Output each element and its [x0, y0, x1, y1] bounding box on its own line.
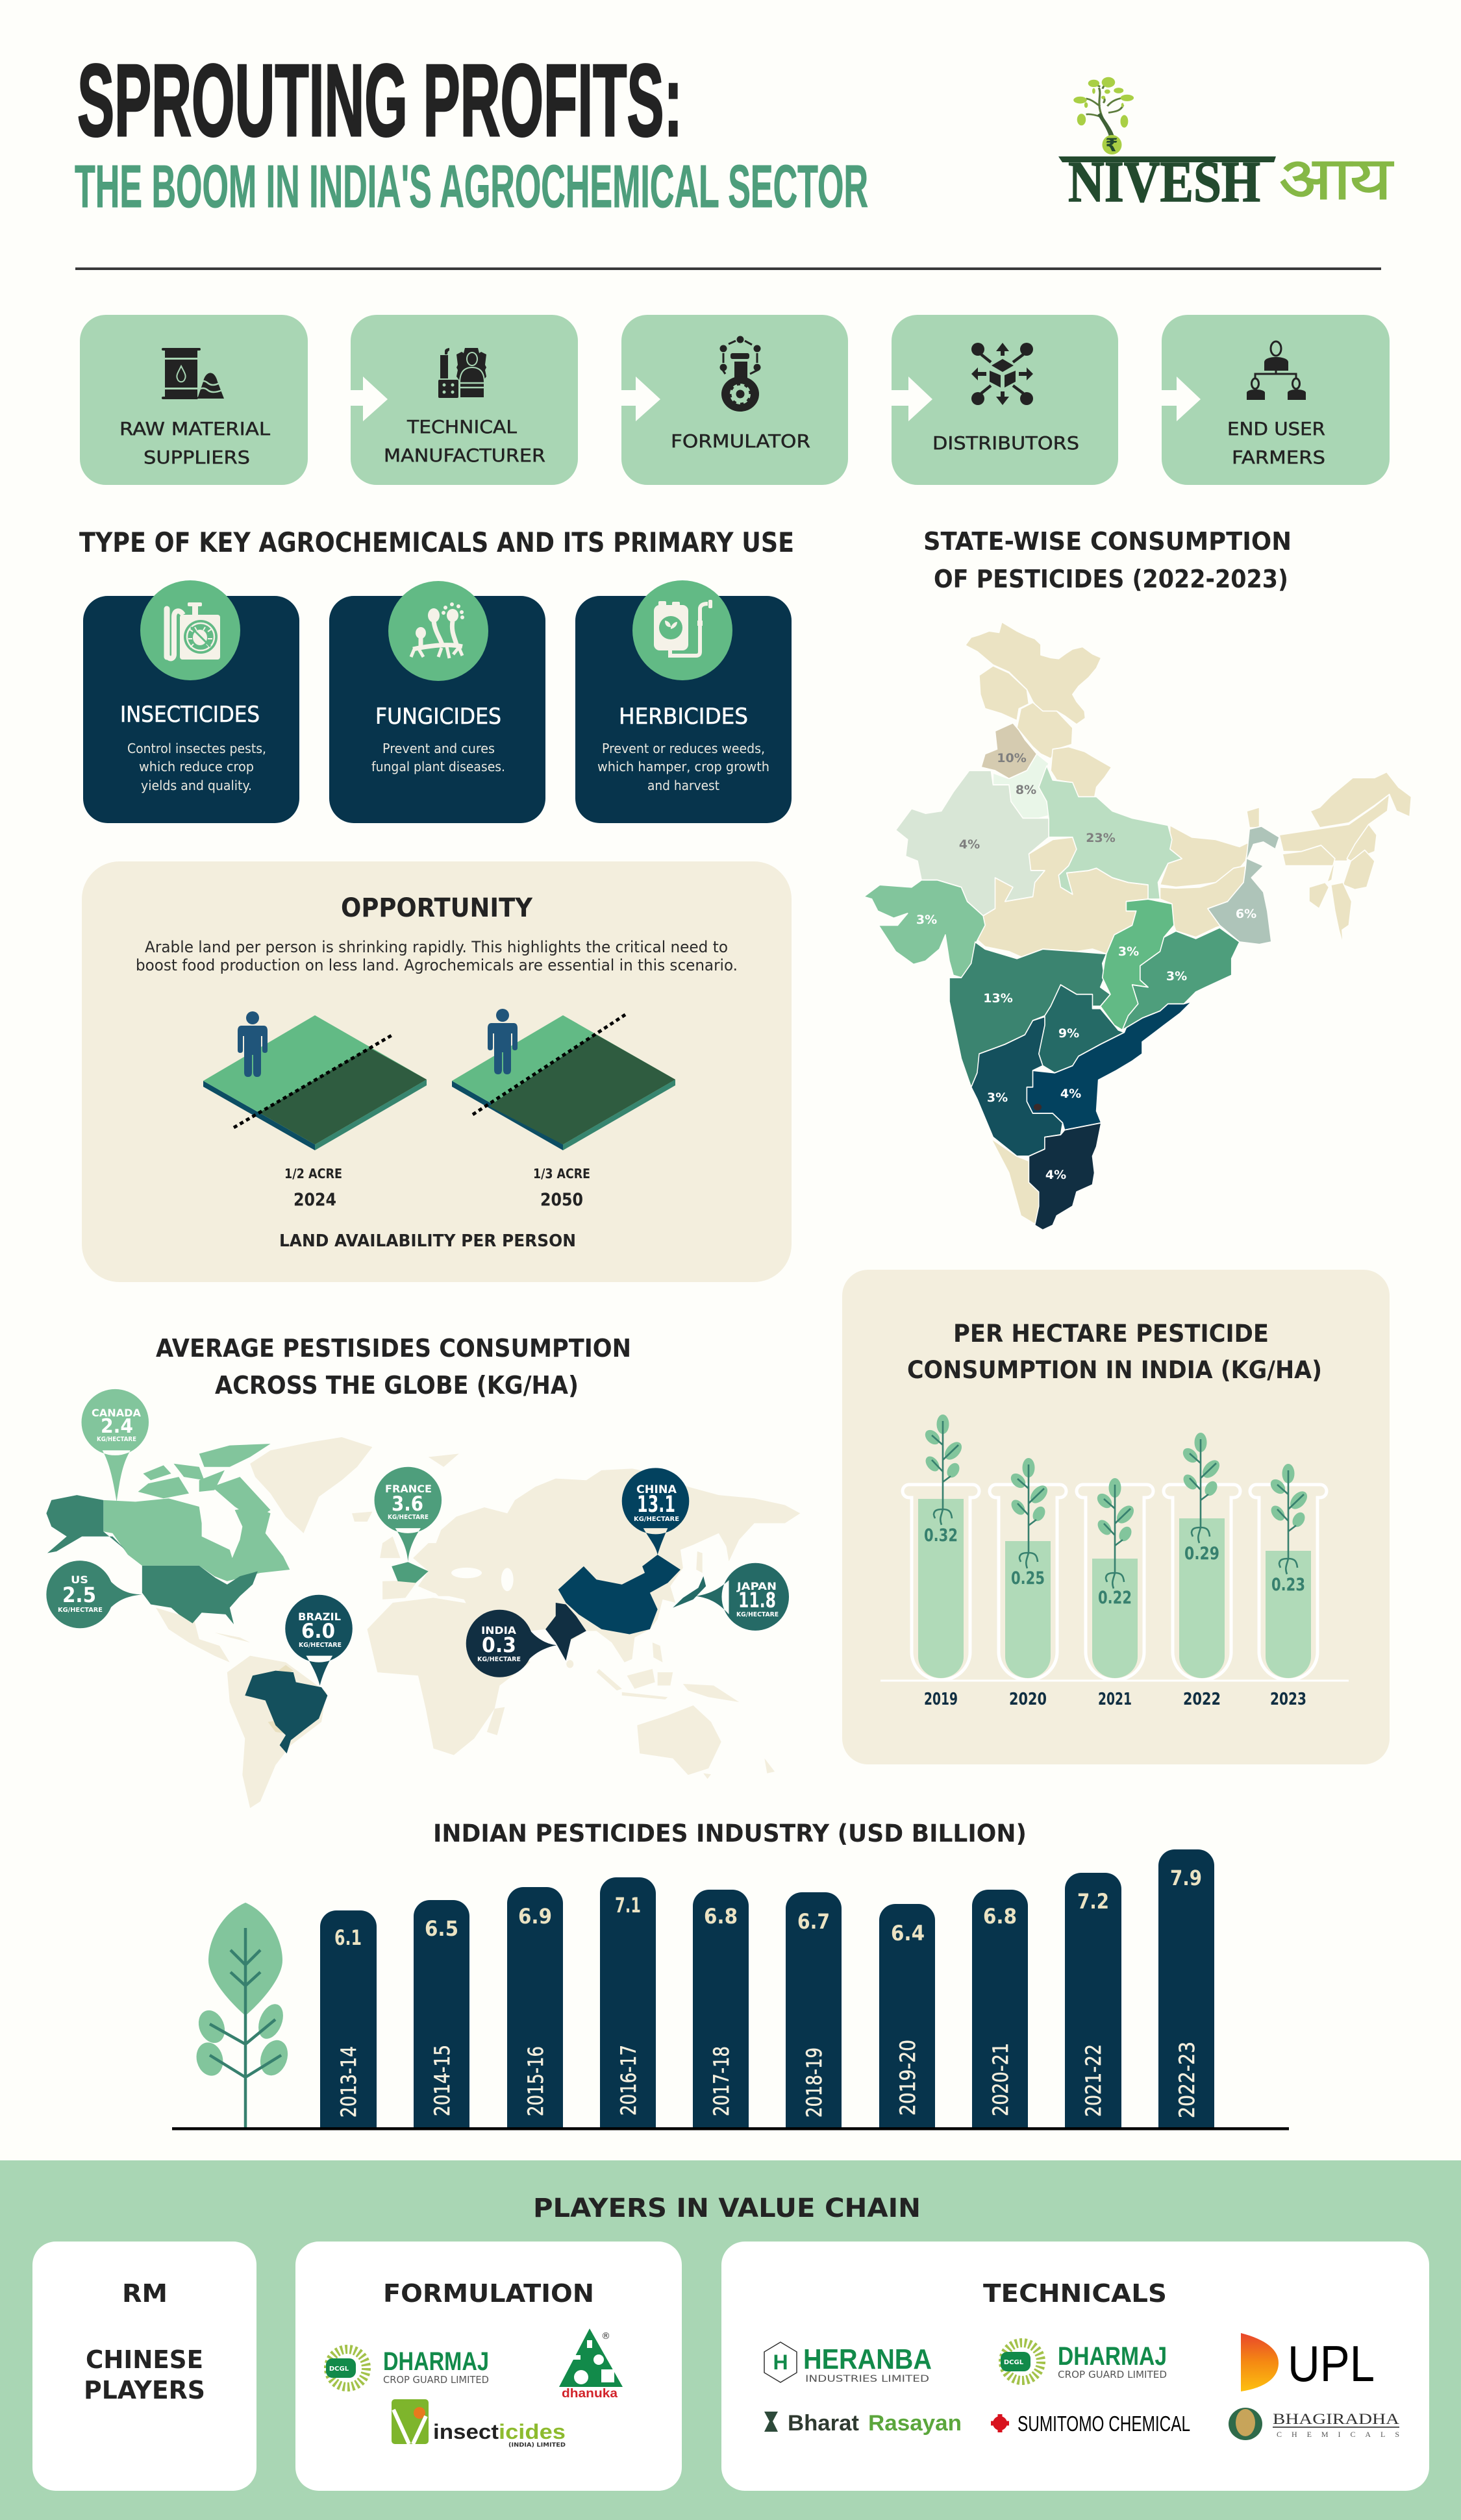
state percentage labels: 3% [1166, 969, 1187, 983]
logo: Nivesh Aay [1058, 77, 1395, 227]
logo: dharmaj: CROP GUARD LIMITED [383, 2374, 489, 2386]
pin: brazil: BRAZIL [298, 1611, 341, 1623]
pin: france [375, 1467, 442, 1561]
land plot 2050 [452, 1009, 675, 1150]
rotated year labels: 2015-16 [523, 2046, 548, 2116]
value chain flow [80, 315, 1390, 485]
pin: canada [81, 1389, 149, 1501]
logo: insecticides india [392, 2399, 566, 2449]
description: yields and quality. [141, 778, 252, 793]
pin: brazil: KG/HECTARE [299, 1642, 342, 1649]
bar values: 6.7 [797, 1909, 830, 1934]
step card: technical manufacturer: MANUFACTURER [384, 445, 545, 466]
bar values: 6.9 [518, 1904, 552, 1929]
state percentage labels: 13% [983, 991, 1013, 1006]
pin: china [622, 1468, 689, 1555]
world map [46, 1389, 800, 1808]
heading [907, 1320, 1322, 1384]
bars [320, 1849, 1214, 2127]
icon: person [488, 1009, 518, 1074]
logo: upl [1241, 2333, 1375, 2392]
section: players in value chain [0, 2160, 1461, 2520]
heading: indian pesticides industry: INDIAN PESTICIDES INDUSTRY (USD BILLION) [433, 1820, 1027, 1847]
alaska and usa [46, 1495, 258, 1624]
state percentage labels: 3% [1118, 945, 1139, 959]
logo: insecticides india: (INDIA) LIMITED [508, 2442, 566, 2449]
logo: dharmaj: DHARMAJ [383, 2347, 489, 2376]
state percentage labels: 6% [1236, 907, 1256, 921]
heading: PER HECTARE PESTICIDE [953, 1320, 1269, 1348]
state percentage labels: 4% [959, 837, 980, 852]
step card: formulator [621, 315, 848, 485]
card: formulation [295, 2242, 682, 2491]
test tube 2021: 0.22 [1098, 1588, 1132, 1608]
test tube 2021: 2021 [1098, 1690, 1132, 1709]
bar values: 6.1 [334, 1925, 362, 1950]
paragraph [136, 938, 738, 974]
test tube 2020 [990, 1458, 1066, 1709]
labels 2050: 1/3 ACRE [533, 1166, 590, 1181]
bar values: 7.1 [615, 1893, 641, 1918]
card: technicals: TECHNICALS [983, 2279, 1167, 2308]
name: FUNGICIDES [375, 704, 501, 730]
logo: heranba [764, 2342, 932, 2384]
labels 2050: 2050 [540, 1190, 583, 1210]
card: technicals [721, 2242, 1429, 2491]
test tube 2020: 0.25 [1011, 1568, 1045, 1588]
step card: end user farmers [1162, 315, 1390, 485]
state percentage labels: 10% [997, 751, 1027, 765]
heading: CONSUMPTION IN INDIA (KG/HA) [907, 1356, 1322, 1384]
pin: canada: 2.4 [101, 1415, 133, 1438]
description: and harvest [647, 778, 719, 793]
description: which reduce crop [139, 759, 254, 774]
state percentage labels: 3% [987, 1091, 1008, 1105]
state percentage labels: 4% [1060, 1087, 1081, 1101]
card: RM: CHINESE [86, 2345, 203, 2374]
bar values: 6.8 [983, 1904, 1017, 1929]
rotated year labels: 2021-22 [1081, 2044, 1106, 2117]
test tube 2021 [1077, 1478, 1153, 1709]
paragraph: boost food production on less land. Agrochemicals are essential in this scenario. [136, 956, 738, 974]
card: RM: RM [122, 2279, 168, 2308]
pin: france: KG/HECTARE [388, 1514, 429, 1521]
logo word aay: आय [1280, 138, 1395, 227]
logo: bharat rasayan: Rasayan [868, 2411, 962, 2436]
test tube 2020: 2020 [1009, 1690, 1047, 1709]
logo: dharmaj: DCGL [1004, 2359, 1024, 2366]
labels 2024: 1/2 ACRE [284, 1166, 342, 1181]
icon: factory gear [438, 348, 486, 398]
logo: upl: UPL [1288, 2335, 1375, 2392]
rotated year labels: 2019-20 [895, 2040, 920, 2116]
pin: japan: 11.8 [738, 1588, 776, 1612]
logo: dharmaj [326, 2347, 489, 2387]
logo: dharmaj: DHARMAJ [1058, 2342, 1167, 2371]
state percentage labels: 9% [1058, 1026, 1079, 1041]
pin: us: KG/HECTARE [58, 1607, 103, 1614]
logo: bharat rasayan: Bharat [788, 2411, 859, 2436]
pin: japan [695, 1563, 789, 1631]
test tube 2019 [903, 1414, 979, 1709]
heading: global consumption [156, 1334, 631, 1400]
pin: us: US [71, 1574, 88, 1586]
pin: us [46, 1561, 142, 1628]
pin: china: KG/HECTARE [634, 1516, 679, 1523]
labels 2050 [533, 1166, 590, 1210]
pin: india: KG/HECTARE [477, 1656, 521, 1663]
name: INSECTICIDES [120, 702, 260, 728]
heading: state-wise consumption [923, 527, 1292, 593]
logo: sumitomo chemical: SUMITOMO CHEMICAL [1018, 2412, 1190, 2436]
description [127, 741, 266, 793]
icon: barrel and pile [162, 348, 224, 399]
arrow [621, 377, 660, 421]
icon: fungus [411, 602, 464, 658]
card: formulation: FORMULATION [383, 2279, 594, 2308]
state percentage labels: 23% [1086, 831, 1116, 845]
state percentage labels: 3% [916, 913, 937, 927]
subtitle: THE BOOM IN INDIA'S AGROCHEMICAL SECTOR [75, 153, 868, 220]
india choropleth map [864, 622, 1411, 1230]
test tube 2022: 0.29 [1184, 1544, 1219, 1564]
description: Prevent and cures [382, 741, 495, 756]
land plot 2024 [203, 1011, 427, 1150]
decorative plant [193, 1903, 292, 2129]
test tube 2022 [1164, 1433, 1240, 1709]
logo: bhagiradha chemicals [1229, 2408, 1399, 2440]
canada [103, 1444, 290, 1581]
labels 2024: 2024 [293, 1190, 336, 1210]
card: RM [32, 2242, 256, 2491]
rotated year labels [336, 2040, 1199, 2118]
panel: opportunity [82, 861, 792, 1282]
bar values: 6.5 [425, 1916, 458, 1941]
state percentage labels: 4% [1045, 1168, 1066, 1182]
label: FORMULATOR [671, 430, 810, 452]
pin: brazil: 6.0 [301, 1620, 335, 1643]
pin: france: FRANCE [385, 1483, 432, 1495]
logo: dharmaj [1001, 2342, 1167, 2380]
heading: state-wise consumption: OF PESTICIDES (2022-2023) [934, 565, 1288, 593]
logo: bhagiradha chemicals: CHEMICALS [1277, 2430, 1399, 2439]
icon: person [238, 1011, 268, 1077]
logo: insecticides india: insect [433, 2420, 499, 2443]
panel: fungicides [329, 581, 545, 823]
rotated year labels: 2018-19 [802, 2047, 827, 2118]
paragraph: Arable land per person is shrinking rapidly. This highlights the critical need to [145, 938, 728, 956]
logo: bhagiradha chemicals: BHAGIRADHA [1273, 2411, 1399, 2427]
icon: flask with gear [719, 336, 761, 412]
logo: dhanuka [559, 2329, 623, 2401]
label: RAW MATERIAL [119, 418, 270, 439]
bar values: 6.4 [891, 1921, 925, 1946]
pin: china: CHINA [636, 1483, 677, 1496]
rotated year labels: 2022-23 [1175, 2042, 1199, 2118]
name: HERBICIDES [619, 704, 748, 730]
icon: sprayer with bug [167, 602, 220, 660]
logo: heranba: INDUSTRIES LIMITED [805, 2374, 929, 2384]
heading: global consumption: ACROSS THE GLOBE (KG/HA) [215, 1371, 579, 1400]
arrow [1162, 377, 1201, 421]
arrow [892, 377, 932, 421]
test tube 2022: 2022 [1183, 1690, 1221, 1709]
label: TECHNICAL [406, 416, 517, 438]
arrow [351, 377, 388, 421]
pin: japan: KG/HECTARE [736, 1611, 779, 1618]
logo word NIVESH: NIVESH [1068, 150, 1260, 214]
logo: heranba: HERANBA [803, 2343, 932, 2375]
description [371, 741, 505, 774]
test tube 2019: 0.32 [924, 1526, 958, 1546]
step card: raw material suppliers [80, 315, 308, 485]
bar chart: industry size [172, 1849, 1289, 2131]
bar values: 6.8 [704, 1904, 738, 1929]
rotated year labels: 2014-15 [430, 2045, 455, 2116]
heading: key agrochemicals: TYPE OF KEY AGROCHEMICALS AND ITS PRIMARY USE [79, 526, 794, 558]
main title: SPROUTING PROFITS: [77, 43, 682, 158]
labels 2024 [284, 1166, 342, 1210]
logo: dhanuka: dhanuka [562, 2387, 618, 2401]
description: which hamper, crop growth [597, 759, 769, 774]
logo bar [1058, 156, 1276, 162]
heading: OPPORTUNITY [341, 893, 533, 923]
logo: heranba: H [773, 2351, 788, 2374]
logo: insecticides india: icides [499, 2420, 566, 2443]
icon: money tree [1073, 77, 1134, 154]
heading: state-wise consumption: STATE-WISE CONSUMPTION [923, 527, 1292, 556]
bar values: 7.2 [1077, 1889, 1109, 1914]
bar values: 7.9 [1170, 1866, 1202, 1890]
test tube 2023: 0.23 [1271, 1575, 1305, 1595]
panel: herbicides [575, 580, 792, 823]
step card: raw material suppliers: SUPPLIERS [144, 447, 250, 468]
heading: global consumption: AVERAGE PESTISIDES CONSUMPTION [156, 1334, 631, 1363]
pin: canada: CANADA [92, 1407, 142, 1419]
icon: herbicide tank [654, 600, 712, 656]
pin: india: INDIA [481, 1624, 517, 1637]
pin: india [466, 1610, 556, 1677]
step card: technical manufacturer [351, 315, 578, 485]
step card: distributors [892, 315, 1118, 485]
rupee symbol: ₹ [1105, 134, 1118, 156]
label: END USER [1227, 418, 1325, 439]
pin: brazil [285, 1595, 353, 1686]
description: Control insectes pests, [127, 741, 266, 756]
caption: LAND AVAILABILITY PER PERSON [279, 1231, 576, 1251]
logo: sumitomo chemical [991, 2412, 1190, 2436]
card: RM: PLAYERS [84, 2376, 205, 2404]
panel: insecticides [83, 580, 299, 823]
state percentage labels [916, 751, 1256, 1182]
logo: dharmaj: DCGL [329, 2366, 349, 2373]
rotated year labels: 2016-17 [616, 2045, 641, 2116]
state percentage labels: 8% [1016, 783, 1036, 797]
pin: france: 3.6 [392, 1492, 423, 1516]
icon: people hierarchy [1247, 341, 1306, 400]
test tube 2019: 2019 [924, 1690, 958, 1709]
logo: dharmaj: CROP GUARD LIMITED [1058, 2369, 1167, 2380]
icon: distribution network [971, 343, 1033, 405]
description: Prevent or reduces weeds, [602, 741, 765, 756]
rotated year labels: 2017-18 [709, 2046, 734, 2116]
test tube 2023 [1250, 1464, 1327, 1709]
description: fungal plant diseases. [371, 759, 505, 774]
step card: end user farmers: FARMERS [1232, 447, 1325, 468]
description [597, 741, 769, 793]
test tube 2023: 2023 [1270, 1690, 1306, 1709]
pin: us: 2.5 [62, 1583, 96, 1607]
logo: dhanuka: ® [601, 2331, 610, 2341]
pin: japan: JAPAN [736, 1580, 777, 1592]
logo: bharat rasayan [764, 2411, 962, 2436]
pin: china: 13.1 [637, 1492, 675, 1518]
rotated year labels: 2013-14 [336, 2046, 361, 2118]
title block [75, 43, 868, 220]
panel: per hectare consumption [842, 1270, 1390, 1764]
pin: canada: KG/HECTARE [97, 1436, 136, 1443]
bar values [334, 1866, 1202, 1950]
rotated year labels: 2020-21 [988, 2043, 1013, 2116]
heading: PLAYERS IN VALUE CHAIN [533, 2193, 921, 2223]
pin: india: 0.3 [482, 1633, 516, 1657]
label: DISTRIBUTORS [932, 432, 1079, 454]
